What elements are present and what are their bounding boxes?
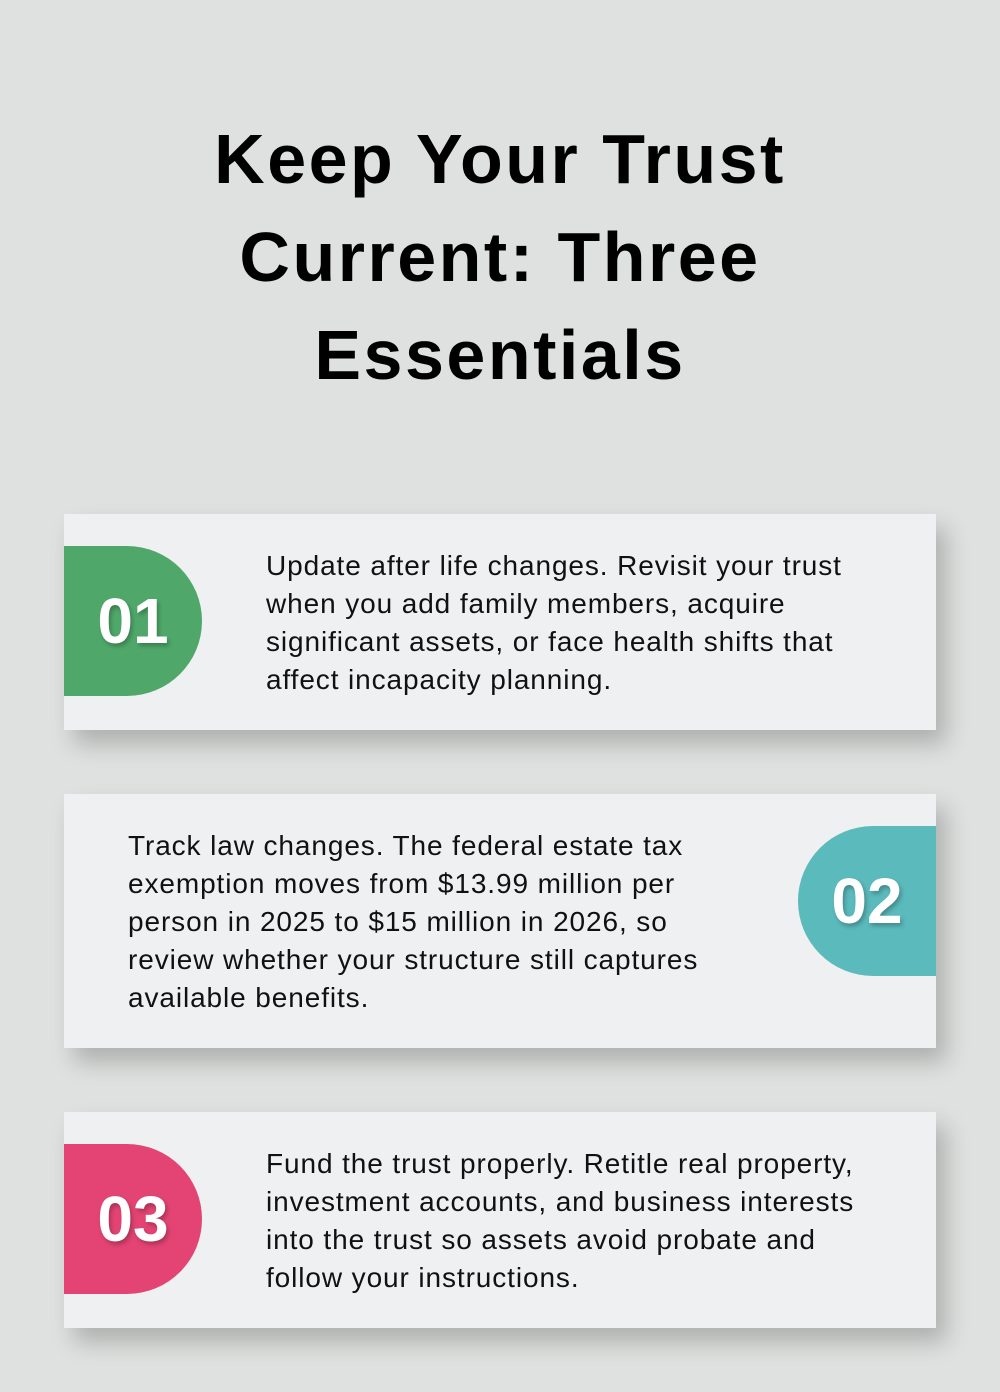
text 01: Update after life changes. Revisit your trust (266, 550, 842, 581)
text 02: person in 2025 to $15 million in 2026, so (128, 906, 668, 937)
text 02: available benefits. (128, 982, 369, 1013)
text 03: follow your instructions. (266, 1262, 580, 1293)
text 03 (266, 1148, 854, 1293)
text 02 (128, 830, 698, 1013)
badge 03: 03 (97, 1183, 169, 1255)
badge 01 (64, 546, 202, 696)
badge 03 (64, 1144, 202, 1294)
text 03: into the trust so assets avoid probate and (266, 1224, 816, 1255)
panel: step 02 (64, 794, 936, 1048)
text 01: when you add family members, acquire (266, 588, 786, 619)
text 02: exemption moves from $13.99 million per (128, 868, 675, 899)
title (214, 120, 786, 394)
text 03: Fund the trust properly. Retitle real property, (266, 1148, 854, 1179)
text 03: investment accounts, and business interests (266, 1186, 854, 1217)
text 01: affect incapacity planning. (266, 664, 612, 695)
panel: step 03 (64, 1112, 936, 1328)
panel: step 01 (64, 514, 936, 730)
title: Essentials (314, 316, 686, 394)
title: Current: Three (239, 218, 761, 296)
text 01 (266, 550, 842, 695)
badge 01: 01 (97, 585, 169, 657)
title: Keep Your Trust (214, 120, 786, 198)
badge 02: 02 (831, 865, 903, 937)
badge 02 (798, 826, 936, 976)
text 02: Track law changes. The federal estate tax (128, 830, 683, 861)
text 02: review whether your structure still captures (128, 944, 698, 975)
text 01: significant assets, or face health shifts that (266, 626, 833, 657)
